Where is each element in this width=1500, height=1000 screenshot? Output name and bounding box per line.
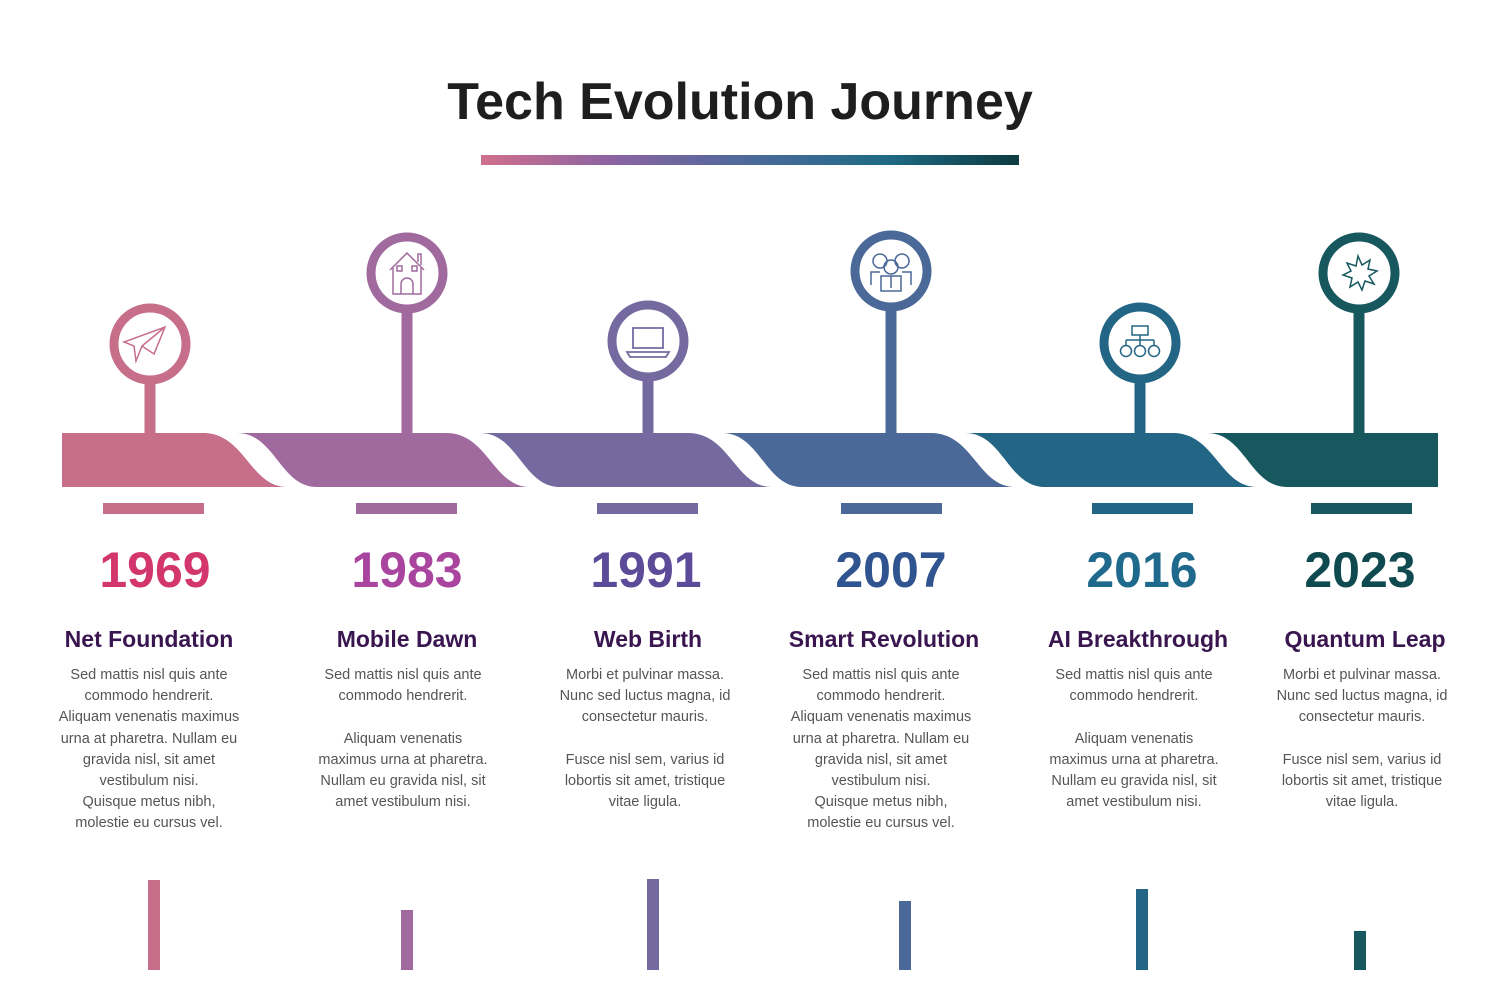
text: Web Birth	[594, 626, 702, 652]
text: maximus urna at pharetra.	[1049, 752, 1219, 768]
pin 1969	[114, 308, 186, 434]
col 2016	[1048, 542, 1228, 810]
text: Aliquam venenatis	[1075, 731, 1193, 747]
pin 1991	[612, 305, 684, 434]
text: Quantum Leap	[1284, 626, 1446, 652]
pin 2016	[1104, 307, 1176, 434]
text: Mobile Dawn	[337, 626, 477, 652]
text: 1983	[351, 542, 463, 598]
text: commodo hendrerit.	[339, 688, 467, 704]
text: Sed mattis nisl quis ante	[802, 667, 960, 683]
text: Fusce nisl sem, varius id	[566, 752, 724, 768]
text: consectetur mauris.	[582, 709, 708, 725]
bottom value bars	[148, 879, 1366, 970]
text: urna at pharetra. Nullam eu	[793, 731, 969, 747]
pin 2007	[855, 235, 927, 434]
text: 1969	[99, 542, 211, 598]
text: gravida nisl, sit amet	[83, 752, 215, 768]
text: commodo hendrerit.	[817, 688, 945, 704]
text: 1991	[590, 542, 702, 598]
text: vitae ligula.	[1326, 794, 1398, 810]
text: Fusce nisl sem, varius id	[1283, 752, 1441, 768]
col 2023	[1277, 542, 1447, 810]
text: Nunc sed luctus magna, id	[1277, 688, 1447, 704]
text: 2007	[835, 542, 947, 598]
text: Quisque metus nibh,	[814, 794, 948, 810]
pin 2023	[1323, 237, 1395, 434]
text: Sed mattis nisl quis ante	[70, 667, 228, 683]
text: commodo hendrerit.	[1070, 688, 1198, 704]
text: gravida nisl, sit amet	[815, 752, 947, 768]
text: Quisque metus nibh,	[82, 794, 216, 810]
text: Aliquam venenatis	[344, 731, 462, 747]
text: lobortis sit amet, tristique	[565, 773, 725, 789]
col 2007	[789, 542, 979, 831]
text: Nullam eu gravida nisl, sit	[320, 773, 486, 789]
text: Smart Revolution	[789, 626, 979, 652]
col 1983	[318, 542, 488, 810]
text: 2023	[1304, 542, 1416, 598]
col 1969	[58, 542, 239, 831]
text: Nullam eu gravida nisl, sit	[1051, 773, 1217, 789]
text: 2016	[1086, 542, 1198, 598]
pin 1983	[371, 237, 443, 434]
text: vitae ligula.	[609, 794, 681, 810]
text: Aliquam venenatis maximus	[59, 709, 239, 725]
text: vestibulum nisi.	[99, 773, 199, 789]
text: consectetur mauris.	[1299, 709, 1425, 725]
text: commodo hendrerit.	[85, 688, 213, 704]
text: molestie eu cursus vel.	[807, 815, 955, 831]
year bars	[103, 503, 1412, 514]
text: Sed mattis nisl quis ante	[324, 667, 482, 683]
text: Morbi et pulvinar massa.	[1283, 667, 1441, 683]
text: molestie eu cursus vel.	[75, 815, 223, 831]
text: Nunc sed luctus magna, id	[560, 688, 730, 704]
title: Tech Evolution Journey	[447, 73, 1033, 131]
text: amet vestibulum nisi.	[335, 794, 471, 810]
col 1991	[560, 542, 730, 810]
text: vestibulum nisi.	[831, 773, 931, 789]
text: urna at pharetra. Nullam eu	[61, 731, 237, 747]
text: Sed mattis nisl quis ante	[1055, 667, 1213, 683]
title underline	[481, 155, 1019, 165]
text: Morbi et pulvinar massa.	[566, 667, 724, 683]
text: Net Foundation	[65, 626, 233, 652]
text: Aliquam venenatis maximus	[791, 709, 971, 725]
text: lobortis sit amet, tristique	[1282, 773, 1442, 789]
text: maximus urna at pharetra.	[318, 752, 488, 768]
text: amet vestibulum nisi.	[1066, 794, 1202, 810]
text: AI Breakthrough	[1048, 626, 1228, 652]
